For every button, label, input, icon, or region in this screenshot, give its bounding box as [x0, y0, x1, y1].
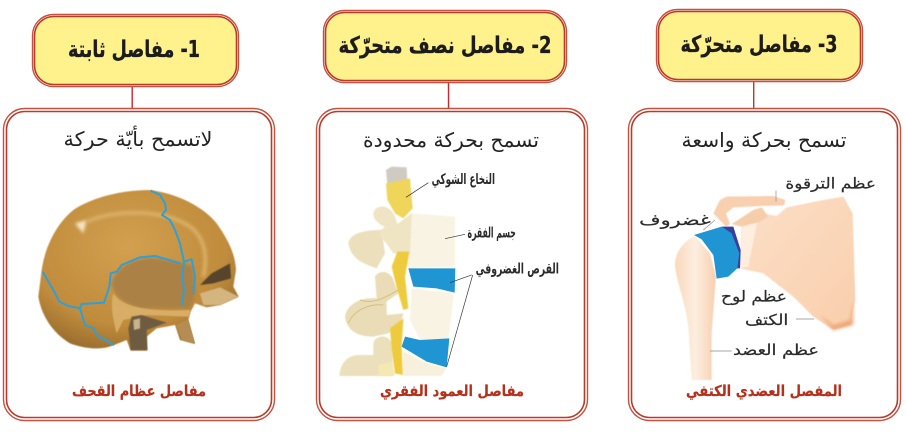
- panel: semi-movable joints: [316, 10, 588, 420]
- subtitle 3: تسمح بحركة واسعة: [682, 128, 846, 152]
- anatomical labels: عظم الترقوة: [785, 174, 876, 192]
- illustration: vertebral column: [339, 167, 559, 376]
- content card 1: [4, 108, 274, 420]
- heading box 3: [656, 10, 862, 82]
- anatomical labels: الكتف: [745, 311, 788, 329]
- connector 3: [753, 82, 754, 108]
- illustration: skull with sutures: [38, 190, 239, 351]
- caption 2: مفاصل العمود الفقري: [380, 382, 524, 401]
- illustration: shoulder joint: [639, 174, 876, 380]
- panel: fixed joints: [4, 14, 274, 420]
- anatomical labels: النخاع الشوكي: [432, 171, 495, 188]
- anatomical labels: جسم الفقرة: [467, 224, 516, 241]
- anatomical labels: عظم لوح: [721, 288, 787, 306]
- leader lines: [703, 191, 814, 351]
- content card 3: [628, 108, 900, 420]
- heading box 2: 2- مفاصل نصف متحرّكة: [338, 33, 552, 59]
- heading box 1: 1- مفاصل ثابتة: [68, 37, 200, 63]
- content card 2: [316, 108, 588, 420]
- leader lines: [406, 183, 473, 367]
- anatomical labels: [639, 174, 876, 359]
- anatomical labels: عظم العضد: [733, 341, 819, 359]
- caption 3: المفصل العضدي الكتفي: [686, 382, 842, 401]
- heading box 3: 3- مفاصل متحرّكة: [680, 32, 838, 58]
- anatomical labels: القرص الغضروفي: [476, 260, 559, 277]
- anatomical labels: [432, 171, 559, 277]
- heading box 1: [32, 14, 238, 86]
- subtitle 2: تسمح بحركة محدودة: [363, 128, 539, 152]
- connector 2: [448, 83, 449, 108]
- subtitle 1: لاتسمح بأيّة حركة: [64, 125, 212, 151]
- panel: movable joints: [628, 10, 900, 420]
- heading box 2: [324, 10, 566, 82]
- connector 1: [132, 87, 133, 108]
- caption 1: مفاصل عظام القحف: [72, 382, 206, 400]
- anatomical labels: غضروف: [639, 211, 711, 229]
